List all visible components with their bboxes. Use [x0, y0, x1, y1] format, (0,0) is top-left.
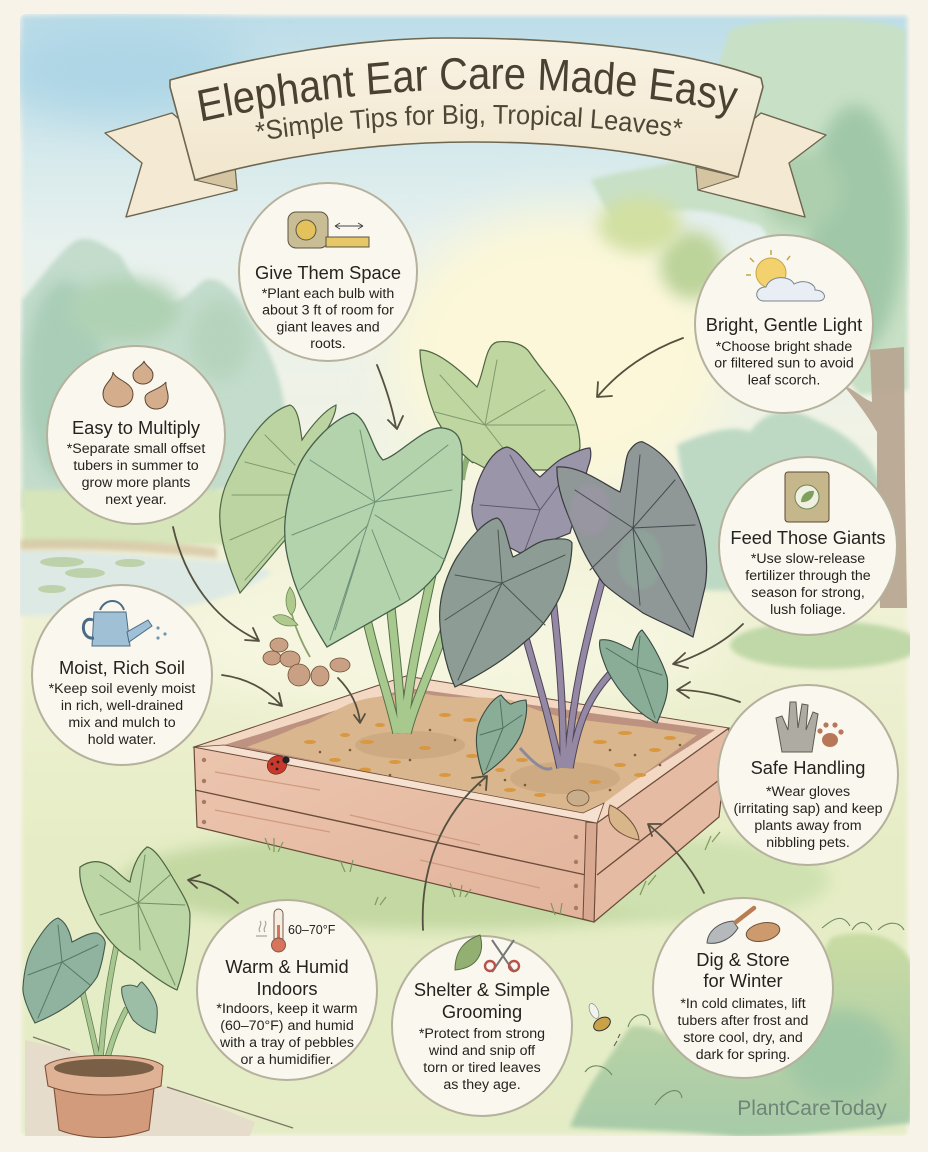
- plant: purple elephant ear: [440, 442, 707, 775]
- panel: feed those giants: [719, 457, 897, 635]
- body: mix and mulch to: [68, 715, 176, 731]
- heading: Dig & Store: [696, 949, 790, 970]
- body: or filtered sun to avoid: [714, 356, 854, 372]
- arrow: shelter to plant: [423, 776, 487, 930]
- leaf: large green: [285, 413, 462, 647]
- bee: [587, 1002, 620, 1046]
- arrow: safe handling to plant: [677, 682, 740, 702]
- body: (irritating sap) and keep: [733, 801, 883, 817]
- icon: glove and paw: [776, 702, 844, 752]
- arrow: light to plant: [597, 338, 683, 397]
- body: next year.: [105, 492, 167, 508]
- panel: shelter and simple grooming: [392, 935, 572, 1116]
- panel: safe handling: [718, 685, 898, 865]
- bottom-right bushes: [570, 933, 914, 1137]
- title: Elephant Ear Care Made Easy: [198, 58, 738, 122]
- panel: warm and humid indoors: [197, 900, 377, 1080]
- body: with a tray of pebbles: [219, 1035, 354, 1051]
- leaf: small centre: [520, 748, 552, 769]
- panel: dig and store: [653, 898, 833, 1078]
- subtitle: *Simple Tips for Big, Tropical Leaves*: [256, 104, 682, 139]
- reeds: [22, 490, 252, 545]
- body: *Indoors, keep it warm: [216, 1001, 358, 1017]
- icon: leaf and scissors: [455, 935, 519, 972]
- body: in rich, well-drained: [61, 698, 183, 714]
- body: season for strong,: [751, 585, 865, 601]
- right trees: [590, 19, 908, 395]
- left trees: [22, 239, 285, 510]
- body: torn or tired leaves: [423, 1060, 541, 1076]
- body: tubers after frost and: [678, 1013, 808, 1029]
- plant: green elephant ear: [220, 342, 580, 733]
- heading: Feed Those Giants: [730, 527, 886, 548]
- lower right canopy: [677, 411, 885, 595]
- leaf: dark front: [440, 518, 572, 687]
- body: *Wear gloves: [766, 784, 850, 800]
- body: *Use slow-release: [751, 551, 865, 567]
- icon: thermometer: [256, 909, 336, 952]
- body: as they age.: [443, 1077, 521, 1093]
- panel: easy to multiply: [47, 346, 225, 524]
- arrow: dig to tuber: [648, 824, 704, 893]
- leaf: pot small: [122, 982, 157, 1033]
- pond: [18, 550, 272, 616]
- arrow: multiply to tubers: [173, 527, 259, 641]
- arrow: warm to potted plant: [188, 875, 238, 903]
- heading: for Winter: [703, 970, 783, 991]
- body: giant leaves and: [276, 319, 380, 335]
- body: *Plant each bulb with: [262, 286, 394, 302]
- trunk: [843, 347, 907, 608]
- sprouting tubers on bed corner: [567, 790, 639, 840]
- leaf: pot large: [80, 847, 190, 990]
- body: leaf scorch.: [748, 372, 820, 388]
- leaf: top green: [420, 342, 580, 473]
- arrow: feed to plant: [673, 624, 743, 668]
- bed front and side walls: [194, 747, 597, 922]
- body: lush foliage.: [770, 602, 846, 618]
- watermark: PlantCareToday: [737, 1097, 887, 1120]
- leaf: right purple: [557, 442, 707, 637]
- body: dark for spring.: [696, 1047, 790, 1063]
- icon: thermometer: 60–70°F: [288, 923, 336, 937]
- body: fertilizer through the: [745, 568, 871, 584]
- body: wind and snip off: [428, 1043, 535, 1059]
- soil: [247, 693, 697, 813]
- body: *In cold climates, lift: [680, 996, 806, 1012]
- leaf: pot left: [23, 918, 105, 1023]
- icon: watering can: [83, 601, 167, 646]
- ladybug: [264, 752, 290, 778]
- body: store cool, dry, and: [683, 1030, 803, 1046]
- body: *Choose bright shade: [716, 339, 852, 355]
- body: plants away from: [754, 818, 862, 834]
- body: or a humidifier.: [240, 1052, 334, 1068]
- paved path: [25, 1040, 255, 1136]
- panel: bright gentle light: [695, 235, 873, 413]
- body: nibbling pets.: [766, 835, 850, 851]
- arrow: soil to bed: [222, 675, 282, 706]
- body: *Keep soil evenly moist: [49, 681, 195, 697]
- body: *Protect from strong: [419, 1026, 545, 1042]
- arrow: tubers to soil: [338, 678, 365, 723]
- body: (60–70°F) and humid: [220, 1018, 354, 1034]
- body: *Separate small offset: [67, 441, 205, 457]
- body: grow more plants: [82, 475, 190, 491]
- icon: fertilizer bag: [785, 472, 829, 522]
- title banner: [104, 37, 827, 218]
- panel: moist rich soil: [32, 585, 212, 765]
- tubers with sprout: [263, 587, 350, 686]
- leaf: small right: [600, 630, 668, 723]
- heading: Safe Handling: [751, 757, 865, 778]
- heading: Warm & Humid: [225, 956, 349, 977]
- leaf: back left green: [220, 405, 336, 593]
- heading: Shelter & Simple: [414, 979, 550, 1000]
- icon: tape measure: [288, 212, 369, 248]
- body: about 3 ft of room for: [262, 303, 394, 319]
- lawn shadows: [119, 836, 657, 936]
- body: hold water.: [88, 732, 156, 748]
- leaf: back purple: [472, 447, 591, 553]
- heading: Easy to Multiply: [72, 417, 201, 438]
- icon: sun and cloud: [746, 250, 824, 301]
- raised garden bed: [194, 676, 729, 922]
- mulch flecks: [304, 713, 681, 801]
- heading: Give Them Space: [255, 262, 401, 283]
- arrow: space to plant: [377, 365, 403, 429]
- body: roots.: [310, 336, 346, 352]
- body: tubers in summer to: [73, 458, 199, 474]
- potted plant: [23, 847, 190, 1138]
- icon: bulbs: [103, 361, 168, 409]
- heading: Bright, Gentle Light: [706, 314, 862, 335]
- pot: [54, 1088, 154, 1138]
- icon: trowel and tubers: [707, 908, 781, 944]
- heading: Grooming: [442, 1001, 522, 1022]
- bed interior: [194, 676, 729, 823]
- heading: Moist, Rich Soil: [59, 657, 185, 678]
- panel: give them space: [239, 183, 417, 361]
- heading: Indoors: [257, 978, 317, 999]
